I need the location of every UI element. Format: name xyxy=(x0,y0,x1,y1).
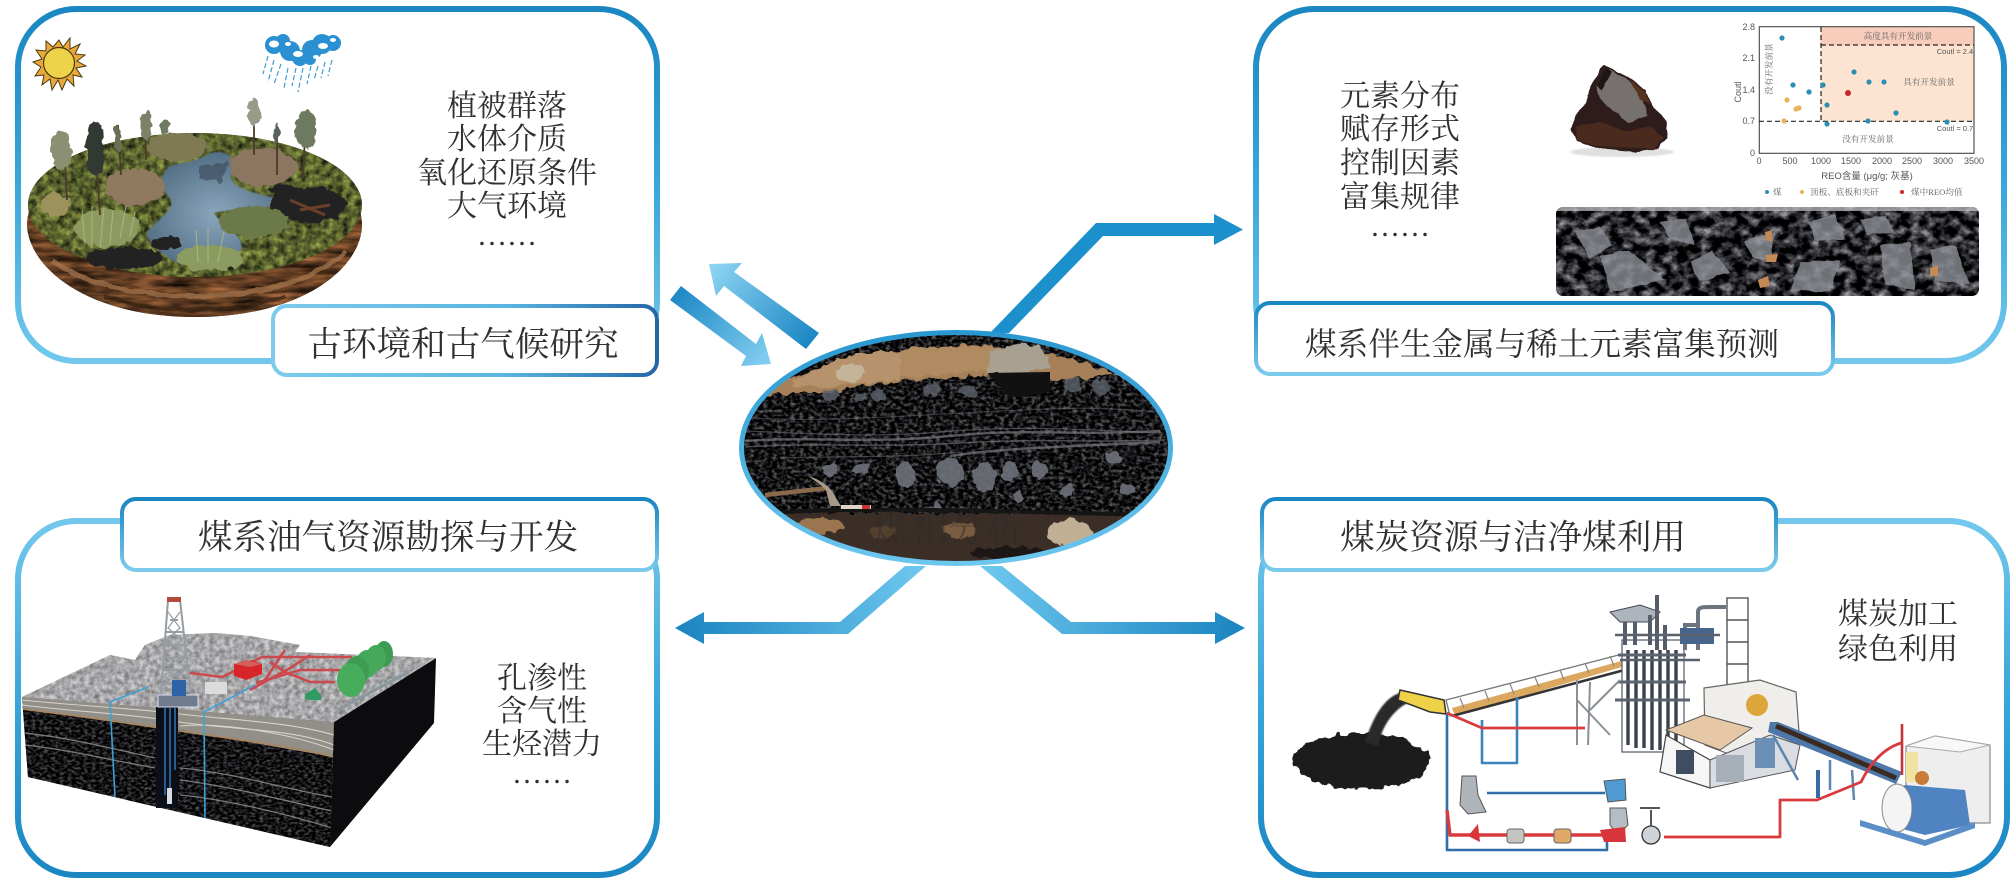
scatter chart: REO content vs Coutl: 500 xyxy=(1782,156,1798,166)
text block: element topics: 赋存形式 xyxy=(1340,113,1460,146)
green box xyxy=(305,688,321,700)
illustration: drilling block diagram xyxy=(22,597,436,847)
arrow: towards palaeoenvironment core, inward xyxy=(670,286,771,366)
text block: palaeoenvironment topics xyxy=(417,90,597,252)
gas wells xyxy=(110,685,255,818)
illustration: coal processing plant xyxy=(1293,595,1990,850)
water pool xyxy=(147,152,286,265)
green spheres xyxy=(337,641,407,711)
block top surface xyxy=(22,633,436,722)
scatter chart: REO content vs Coutl: 2000 xyxy=(1872,156,1892,166)
text block: element topics: 元素分布 xyxy=(1340,80,1460,113)
scatter chart: REO content vs Coutl: 1000 xyxy=(1811,156,1831,166)
peat clumps xyxy=(87,185,346,269)
heading tab: metals and rare earths xyxy=(1256,303,1833,374)
text block: element topics: 控制因素 xyxy=(1340,147,1460,180)
arrow: to metals and rare earth panel xyxy=(990,214,1243,333)
heading tab: coal resources: 煤炭资源与洁净煤利用 xyxy=(1340,519,1686,557)
scatter chart: REO content vs Coutl: REO含量 (μg/g; 灰基) xyxy=(1821,170,1913,182)
scatter chart: REO content vs Coutl: Coutl = 0.7 xyxy=(1937,124,1973,133)
text block: oil and gas topics xyxy=(482,662,602,790)
red building xyxy=(234,660,262,680)
block right face xyxy=(330,658,436,847)
red surface pipes xyxy=(190,650,352,690)
chart legend: 煤中REO均值 xyxy=(1911,186,1963,197)
text block: palaeoenvironment topics: 氧化还原条件 xyxy=(417,157,597,190)
text block: palaeoenvironment topics: …… xyxy=(477,219,537,252)
text block: clean coal topics: 绿色利用 xyxy=(1838,633,1958,666)
chimney xyxy=(1727,598,1748,688)
equipment unit xyxy=(205,682,227,694)
scatter chart: REO content vs Coutl: 1500 xyxy=(1841,156,1861,166)
scatter chart: REO content vs Coutl: 2.8 xyxy=(1742,22,1755,32)
text block: element topics: 富集规律 xyxy=(1340,181,1460,214)
grey stones row xyxy=(821,378,1110,402)
trees xyxy=(64,105,305,215)
arrow: to clean coal panel xyxy=(980,566,1245,644)
scatter chart: REO content vs Coutl: Coutl xyxy=(1733,81,1743,103)
scatter chart: REO content vs Coutl: 3000 xyxy=(1933,156,1953,166)
scatter chart: REO content vs Coutl xyxy=(1733,22,1984,197)
derrick xyxy=(158,597,198,707)
heading tab: oil and gas exploration xyxy=(122,499,657,570)
text block: clean coal topics: 煤炭加工 xyxy=(1838,598,1958,631)
process tower xyxy=(1577,595,1726,752)
panel: metal and rare earth enrichment xyxy=(1256,9,2004,374)
chart legend xyxy=(1765,186,1963,197)
coal heap xyxy=(1293,692,1429,789)
hammer xyxy=(765,476,871,509)
scatter chart: REO content vs Coutl: 0 xyxy=(1756,156,1762,166)
scatter chart: REO content vs Coutl: 3500 xyxy=(1964,156,1984,166)
text block: oil and gas topics: 孔渗性 xyxy=(497,662,587,695)
scatter chart: REO content vs Coutl: 1.4 xyxy=(1742,85,1755,95)
yellow hopper xyxy=(1398,690,1446,714)
text block: oil and gas topics: 含气性 xyxy=(497,695,587,728)
panel: coal resources and clean coal xyxy=(1261,499,2007,875)
reed clumps xyxy=(40,133,297,271)
text block: clean coal topics xyxy=(1838,598,1958,666)
coal banding xyxy=(745,408,1165,458)
text block: oil and gas topics: 生烃潜力 xyxy=(482,728,602,761)
ghost label: 煤相分析 xyxy=(872,509,1024,551)
scatter chart: REO content vs Coutl: Coutl = 2.4 xyxy=(1937,47,1973,56)
photo: coal sample rock xyxy=(1570,65,1674,157)
control units xyxy=(1460,776,1660,844)
inclined conveyor xyxy=(1446,652,1634,716)
heading tab: metals and rare earths: 煤系伴生金属与稀土元素富集预测 xyxy=(1305,327,1779,362)
scatter chart: REO content vs Coutl: 0.7 xyxy=(1742,116,1755,126)
panel: palaeoenvironment and palaeoclimate xyxy=(18,9,657,375)
arrow: outward to palaeoenvironment xyxy=(709,263,819,349)
heading tab: coal resources xyxy=(1262,499,1776,570)
main building xyxy=(1660,680,1800,788)
grey boulders xyxy=(823,452,1135,509)
icon: rain cloud xyxy=(263,34,341,92)
icon: sun xyxy=(33,38,86,90)
scatter chart: REO content vs Coutl: 2500 xyxy=(1902,156,1922,166)
text block: palaeoenvironment topics: 植被群落 xyxy=(447,90,567,123)
boiler unit xyxy=(1860,736,1990,846)
text block: palaeoenvironment topics: 大气环境 xyxy=(447,190,567,223)
scatter chart: REO content vs Coutl: 0 xyxy=(1750,148,1755,158)
heading tab: palaeoenvironment: 古环境和古气候研究 xyxy=(307,326,619,364)
text block: palaeoenvironment topics: 水体介质 xyxy=(447,123,567,156)
chart legend: 顶板、底板和夹矸 xyxy=(1810,186,1879,197)
text block: oil and gas topics: …… xyxy=(512,757,572,790)
bottom tan band xyxy=(784,511,1130,561)
central coal seam photo ellipse xyxy=(740,330,1172,571)
scatter chart: REO content vs Coutl: 没有开发前景 xyxy=(1763,43,1774,95)
wellbore xyxy=(156,707,178,808)
tan overburden band xyxy=(760,345,1150,395)
arrow: to oil and gas panel xyxy=(675,566,926,644)
heading tab: oil and gas exploration: 煤系油气资源勘探与开发 xyxy=(198,519,578,557)
scatter chart: REO content vs Coutl: 具有开发前景 xyxy=(1903,76,1955,87)
text block: element topics: …… xyxy=(1370,210,1430,243)
scatter chart: REO content vs Coutl: 2.1 xyxy=(1742,53,1755,63)
photo: coal pile xyxy=(1556,204,1979,296)
heading tab: palaeoenvironment xyxy=(273,306,657,375)
scatter chart: REO content vs Coutl: 高度具有开发前景 xyxy=(1864,30,1933,41)
block front face xyxy=(22,697,334,847)
panel: coal-measure oil and gas xyxy=(18,499,657,875)
scatter chart: REO content vs Coutl: 没有开发前景 xyxy=(1842,133,1894,144)
illustration: wetland island xyxy=(27,99,362,317)
text block: element topics xyxy=(1340,80,1460,243)
process pipes xyxy=(1447,697,1902,850)
chart legend: 煤 xyxy=(1773,186,1782,197)
outfeed conveyor xyxy=(1768,722,1902,800)
